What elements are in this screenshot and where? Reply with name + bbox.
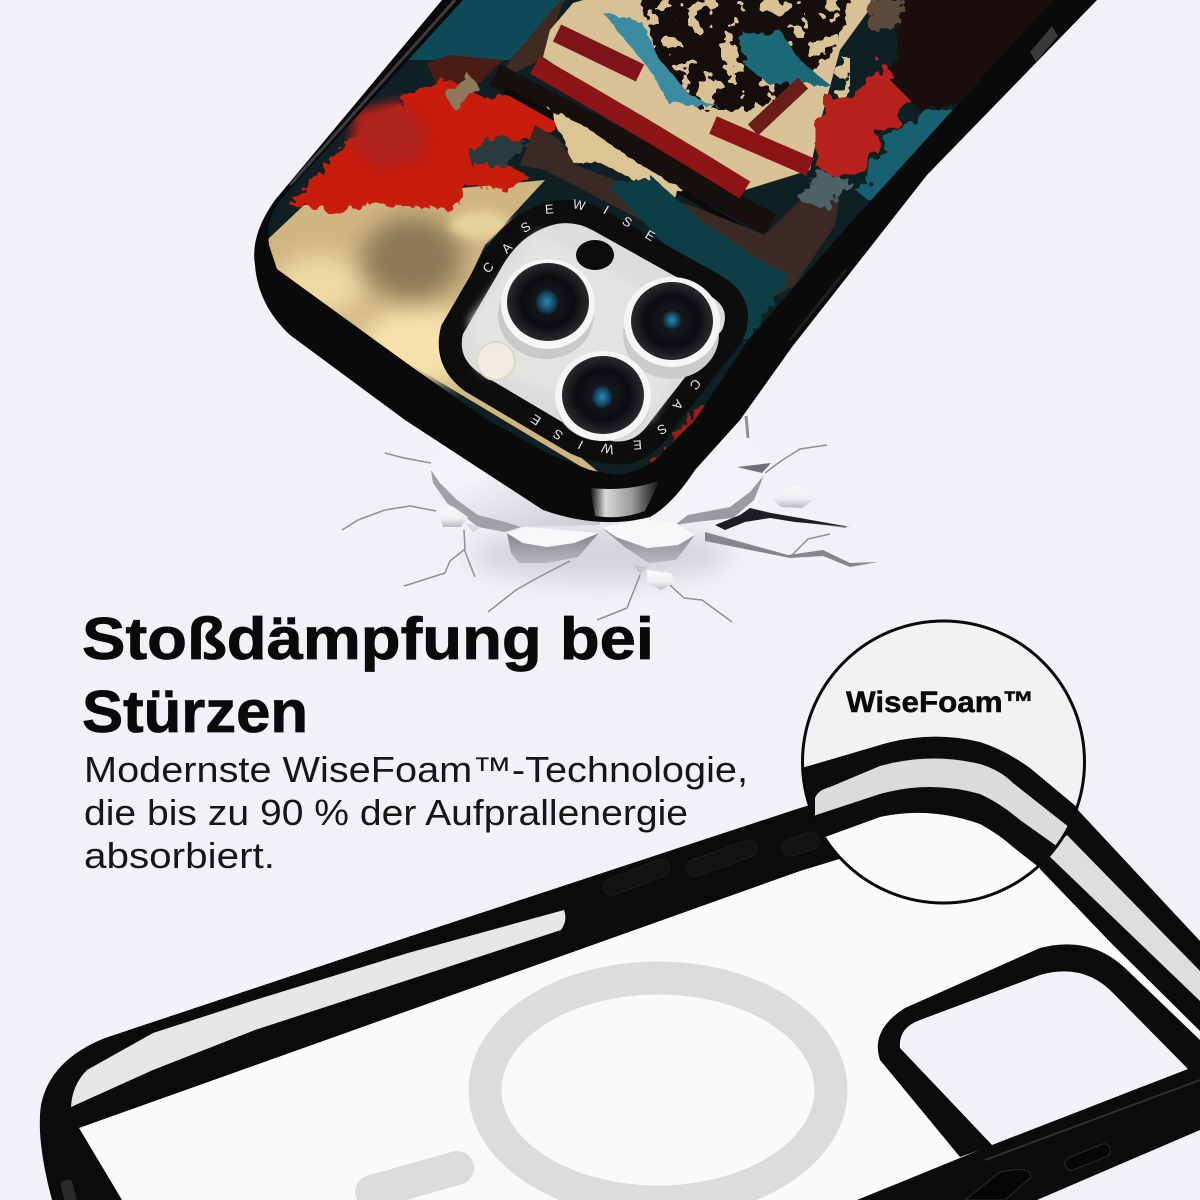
heading: [82, 606, 654, 745]
body text: [84, 749, 748, 876]
flash: [477, 342, 515, 380]
camera cutout: [900, 971, 1188, 1145]
illustration: cracked wall impact: [342, 416, 878, 622]
bottom buttons: [965, 1142, 1112, 1200]
corner highlight: [590, 480, 660, 517]
island ring: [450, 211, 736, 453]
right plate notch: [737, 463, 771, 473]
art: brown hill: [520, 125, 840, 305]
art: torii beams: [495, 33, 810, 240]
body text: die bis zu 90 % der Aufprallenergie: [84, 792, 688, 833]
foam strip right: [1047, 835, 1200, 1001]
lens 1: [498, 259, 595, 359]
chunk A: [507, 533, 599, 563]
camera cutout frame: [878, 944, 1200, 1157]
art: dark tree: [640, 0, 850, 110]
rear band sheen: [985, 1080, 1200, 1160]
art: red foliage: [288, 75, 563, 212]
foam strip left: [71, 910, 565, 1107]
case artwork: [268, 0, 1052, 475]
body text: Modernste WiseFoam™-Technologie,: [84, 749, 748, 790]
left plate edge: [431, 470, 521, 532]
wall chunks: [431, 420, 818, 590]
top buttons: [601, 830, 821, 898]
clear back: [79, 810, 1200, 1200]
left plate: [431, 450, 600, 527]
body text: absorbiert.: [84, 835, 275, 876]
chunk B: [602, 528, 695, 563]
art: teal foliage: [605, 15, 720, 108]
small chunks: [771, 485, 818, 508]
heading: Stoßdämpfung bei: [82, 606, 654, 672]
side rim: [290, 0, 455, 185]
magnifier outline: [802, 621, 1084, 903]
MagSafe pill: [372, 1168, 457, 1192]
side notch: [60, 1179, 77, 1200]
art: teal shadow: [610, 175, 790, 345]
callout label: WiseFoam™: [846, 686, 1034, 719]
hairline cracks: [342, 416, 846, 622]
magnifier callout: WiseFoam: [795, 620, 1090, 910]
art: brown rock: [427, 55, 503, 87]
camera island: [438, 199, 748, 464]
phone with patterned case: [254, 0, 1097, 522]
brand text top: CASEWISE: [484, 199, 656, 272]
dark crack: [715, 508, 850, 530]
bumper frame: [40, 750, 1200, 1200]
heading: Stürzen: [82, 679, 308, 745]
island light area: [470, 232, 700, 420]
lens 3: [555, 351, 651, 441]
lens 2: [623, 277, 720, 379]
art: brown band: [506, 0, 564, 72]
brand text bottom: CASEWISE: [530, 380, 700, 454]
art: lower beige patch: [550, 110, 683, 197]
right plate: [620, 420, 769, 525]
case body: [254, 0, 1097, 522]
art: clouds: [268, 180, 598, 472]
magnified detail: [804, 736, 1076, 866]
art: bottom red strip: [648, 405, 705, 463]
clear case with MagSafe ring: [40, 750, 1200, 1200]
long wedge crack: [705, 532, 878, 567]
art: central beige panel: [543, 0, 880, 190]
art: right dark and teal: [890, 0, 1060, 110]
art: right red foliage: [815, 60, 915, 175]
art: teal corner: [405, 0, 570, 60]
crack shadow: [470, 527, 730, 583]
microphone hole: [576, 240, 614, 270]
right plate edge: [675, 475, 764, 525]
MagSafe ring: [485, 978, 831, 1200]
side buttons: [1030, 26, 1058, 62]
